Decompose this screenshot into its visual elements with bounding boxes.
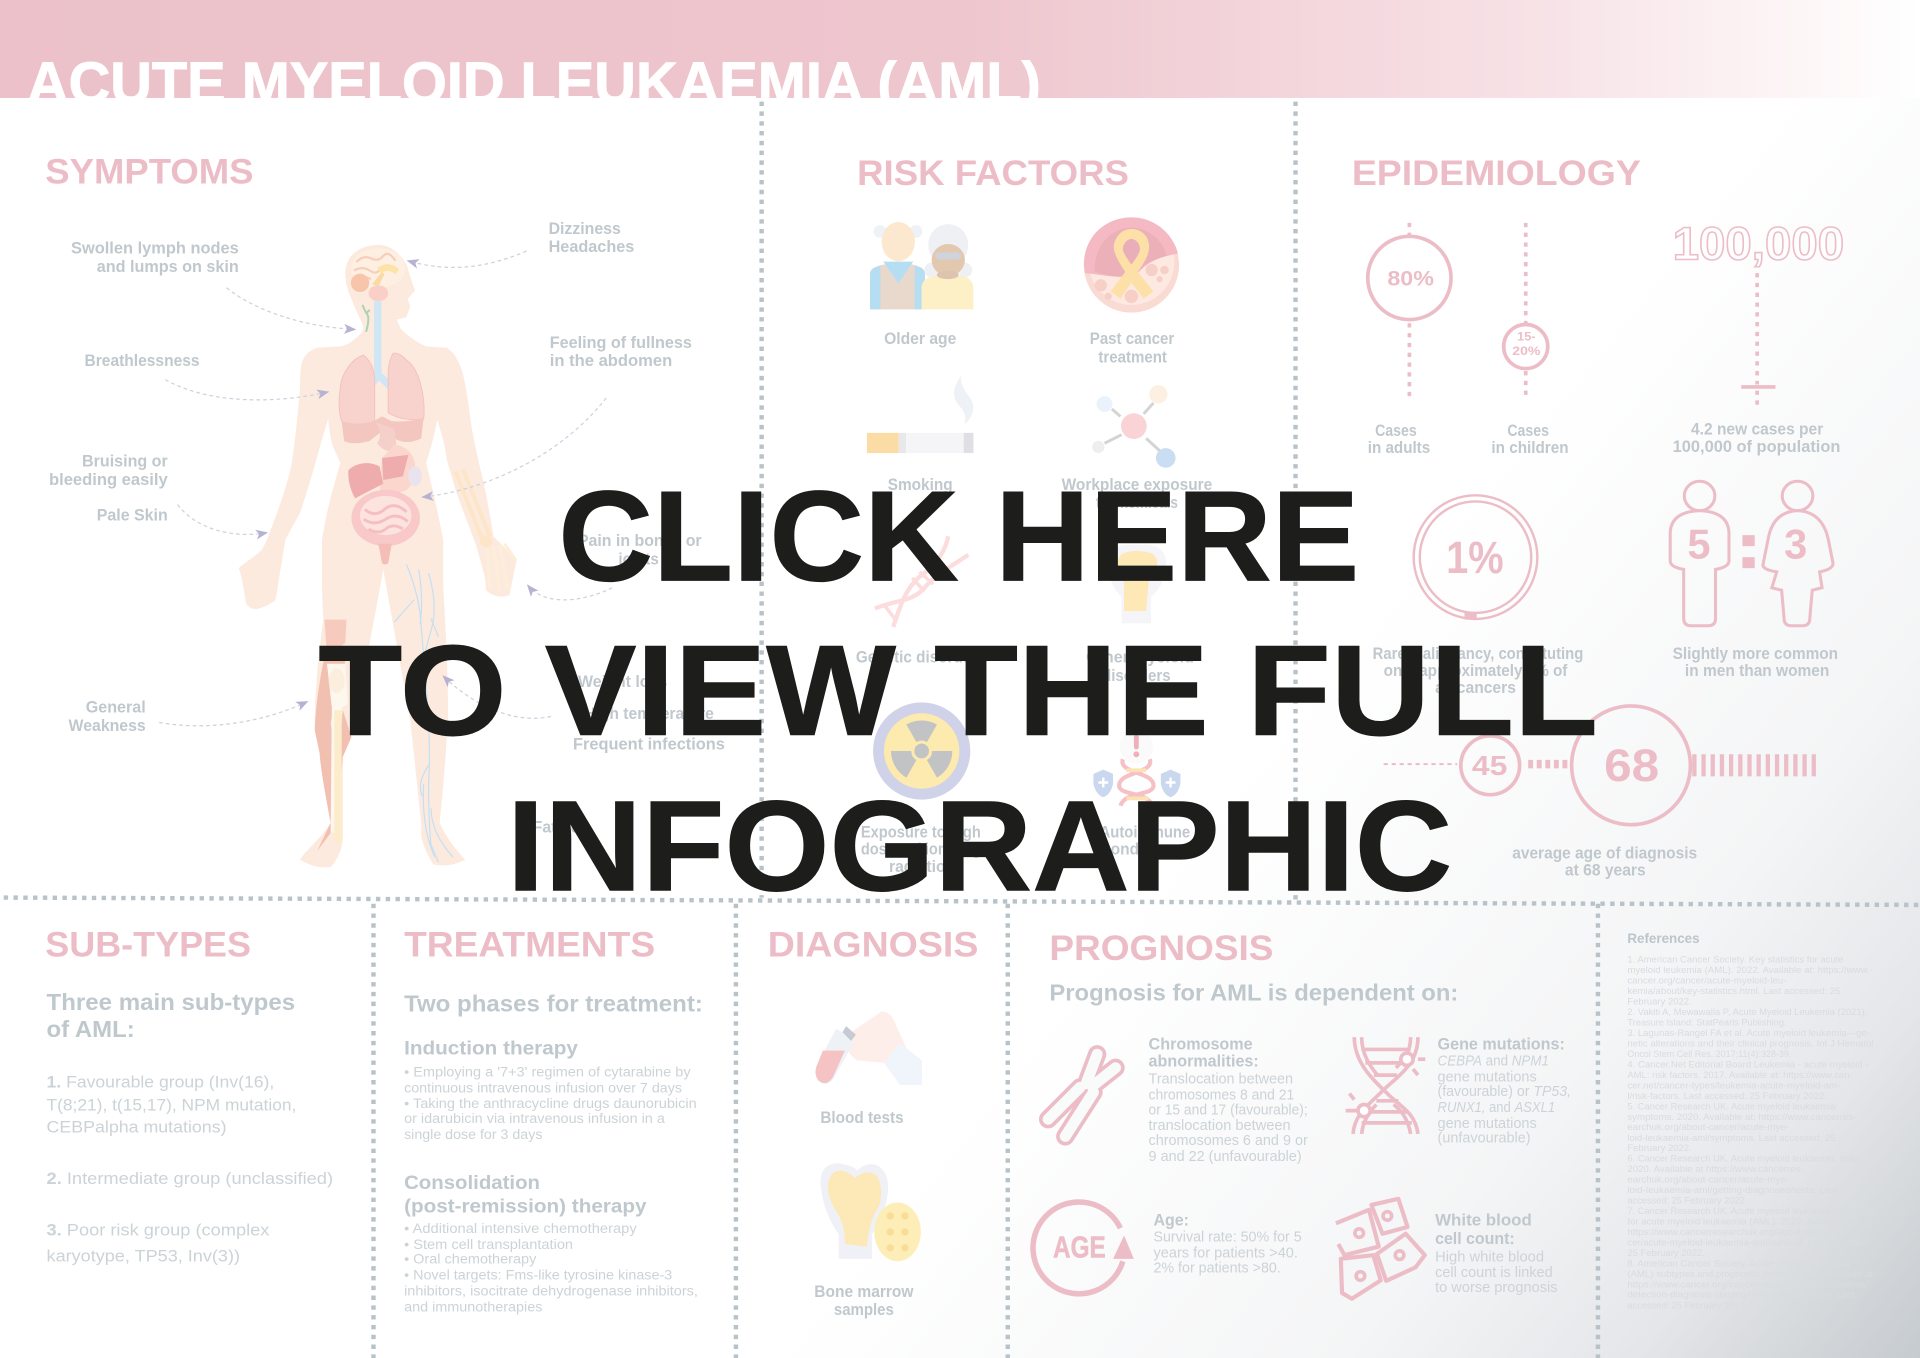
stat: male to female ratio: 5 [1687,520,1711,567]
stat: 80 percent adults: Cases [1375,421,1417,440]
text: age: Survival rate: 50% for 5 [1153,1230,1302,1246]
title banner: ACUTE MYELOID LEUKAEMIA (AML) [27,51,1041,116]
icon: age: AGE [1053,1231,1106,1265]
icon: radiation [873,702,970,800]
text: gene mutations: (unfavourable) [1438,1130,1531,1146]
text: white blood cell count: High white blood [1435,1249,1544,1265]
label: fatigue: Fatigue [533,818,589,837]
text: chromosome abnormalities: chromosomes 8 and 21 [1149,1088,1294,1104]
label: fullness: in the abdomen [550,351,672,370]
text: chromosome abnormalities: 9 and 22 (unfavourable) [1149,1149,1302,1165]
stat: 80 percent adults: 80% [1387,267,1434,290]
text: group list: 3. Poor risk group (complex [47,1221,270,1240]
text: chromosome abnormalities: Chromosome [1149,1034,1253,1053]
label: swollen lymph nodes: and lumps on skin [97,257,239,276]
text: reference list: AML: risk factors. 2017. Available at: https://www.can- [1627,1070,1853,1080]
icon: molecule [1092,385,1176,468]
label: smoking: Smoking [888,475,953,494]
label: bruising: Bruising or [82,452,168,471]
text: consolidation therapy: • Additional intensive chemotherapy [404,1220,638,1236]
brain [351,249,405,301]
stat: average age of diagnosis: 45 [1472,750,1507,781]
label: pain in bones [578,531,702,569]
icon: white blood cells [1336,1199,1425,1299]
icon: age [1033,1202,1134,1294]
heading: symptoms: SYMPTOMS [45,152,253,192]
text: reference list: loid-leukaemia-aml/symptoms. Last accessed: 25 [1627,1133,1836,1143]
label: exposure to radiation: Exposure to high [861,823,981,842]
label: past cancer treatment: treatment [1098,347,1167,366]
text: reference list: 7. Cancer Research UK. Acute myeloid leukaemia: survival [1627,1206,1872,1216]
label: workplace exposure: to chemicals [1096,493,1178,512]
icon: bone [1107,545,1167,623]
text: reference list: earchuk.org/about-cancer/acute-mye- [1627,1175,1789,1185]
intestines [351,490,420,565]
text: chromosome abnormalities: translocation between [1149,1118,1291,1134]
label: exposure to radiation: radiation [889,857,955,876]
text: consolidation therapy: • Stem cell transplantation [404,1236,573,1252]
text: gene mutations: Gene mutations: [1438,1034,1565,1053]
text: gene mutations [1438,1034,1571,1146]
heading: references: References [1627,931,1700,946]
text: induction therapy: • Employing a '7+3' regimen of cytarabine by [404,1063,692,1079]
text: reference list [1627,955,1875,1310]
text: chromosome abnormalities: chromosomes 6 and 9 or [1149,1133,1308,1149]
text: reference list: accessed: 25 February 2022. [1627,1196,1747,1206]
leg veins [394,565,453,862]
text: reference list: cer/acute-myeloid-leukaemia-aml/survival. Last accessed: [1627,1237,1871,1247]
label: pain in bones: joints [617,550,659,569]
text: chromosome abnormalities: or 15 and 17 (favourable); [1149,1102,1308,1118]
stat: 15-20 percent children: Cases [1507,421,1549,440]
label: pale skin: Pale Skin [97,505,168,524]
stat: average age of diagnosis: average age of diagnosis [1512,843,1697,862]
panel: diagnosis [768,924,978,1319]
text: group list: karyotype, TP53, Inv(3)) [47,1246,240,1265]
call to action overlay: TO VIEW THE FULL [318,620,1598,763]
title banner [0,0,1920,116]
label: weight loss and infections: Weight loss [578,672,667,691]
stat: 15-20 percent children: in children [1491,438,1569,457]
label: workplace exposure [1062,475,1212,512]
arrow: dizziness [408,251,527,267]
text: chromosome abnormalities [1149,1034,1308,1165]
stat: new cases per 100,000: 4.2 new cases per [1691,420,1824,439]
text: reference list: (AML) subtypes and prognostic factors. 2018. Available at: [1627,1269,1875,1279]
text: consolidation therapy: Consolidation [404,1172,540,1194]
text: reference list: detection-diagnosis-staging/how-classified.html. Last [1627,1290,1856,1300]
text: age: years for patients >40. [1153,1246,1298,1262]
text: reference list: cancer.org/cancer/acute-myeloid-leu- [1627,976,1787,986]
stat: average age of diagnosis: at 68 years [1565,861,1646,880]
label: past cancer treatment [1090,329,1175,366]
subheading: two phases: Two phases for treatment: [404,990,703,1016]
arrow: breathlessness [165,380,328,400]
label: weight loss and infections: High temperature [584,704,714,723]
label: past cancer treatment: Past cancer [1090,329,1175,348]
text: reference list: cer.net/cancer-types/leukemia-acute-myeloid-am- [1627,1080,1840,1090]
text: reference list: netic alterations and their clinical prognosis. Int J Hematol [1627,1038,1873,1048]
text: chromosome abnormalities: abnormalities: [1149,1052,1259,1071]
subheading: three main sub-types [47,989,295,1042]
heading: diagnosis: DIAGNOSIS [768,924,978,964]
label: other myeloid disorders: disorders [1102,666,1171,685]
arrow: feeling of fullness [422,398,606,497]
arm and hand bones [456,469,516,591]
label: weight loss and infections: Frequent infections [573,734,725,753]
label: breathlessness: Breathlessness [84,351,200,370]
label: exposure to radiation [861,823,981,876]
stat: 1 percent: Rare malignancy, constituting [1373,644,1583,663]
text: induction therapy [404,1037,697,1142]
text: reference list: https://www.cancer.org/cancer/acute-myeloid-leukemia/- [1627,1279,1871,1289]
panel: risk factors [856,153,1212,876]
stat: 15-20 percent children: 20% [1512,344,1541,358]
stat: new cases per 100,000: 100,000 of population [1673,437,1840,456]
label: dizziness: Dizziness [549,219,621,238]
text: white blood cell count: cell count: [1435,1229,1515,1248]
stat: average age of diagnosis: 68 [1604,740,1659,791]
icon: cancer ribbon [1084,217,1179,313]
panel: sub-types [45,924,333,1265]
label: autoimmune conditions: conditions [1102,840,1180,859]
label: dizziness [549,219,634,256]
text: reference list: 25 February 2022. [1627,1248,1705,1258]
icon: autoimmune [1093,730,1180,806]
label: swollen lymph nodes: Swollen lymph nodes [71,238,239,257]
text: reference list: 2020. Available at https://www.cancerres- [1627,1164,1804,1174]
stat: male to female ratio [1670,481,1838,680]
label: fullness [550,333,692,370]
call to action overlay [318,465,1598,918]
trachea [372,301,400,397]
text: white blood cell count: cell count is linked [1435,1265,1553,1281]
stat: 1 percent: only approximately 1% of [1384,661,1568,680]
text: reference list: symptoms. 2020. Available at: https://www.cancerres- [1627,1112,1856,1122]
icon: older couple [870,222,973,309]
leg muscles [315,620,351,851]
call to action overlay: CLICK HERE [558,465,1359,608]
stat: male to female ratio: in men than women [1685,661,1829,680]
arrow: weight loss [443,676,551,718]
label: bruising [49,452,169,489]
text: group list: T(8;21), t(15,17), NPM mutation, [47,1096,296,1115]
label: autoimmune conditions: Autoimmune [1100,823,1190,842]
panel: epidemiology [1352,153,1844,880]
body illustration [239,245,517,867]
lymph nodes [362,305,370,332]
heading: treatments: TREATMENTS [404,924,655,964]
heading: risk factors: RISK FACTORS [857,153,1129,193]
text: consolidation therapy: and immunotherapies [404,1298,542,1314]
arrow: swollen lymph nodes [227,288,355,329]
panel: treatments [404,924,703,1314]
stat: male to female ratio: Slightly more common [1673,644,1838,663]
icon: blood test [816,1011,922,1085]
text: chromosome abnormalities: Translocation between [1149,1072,1293,1088]
text: reference list: https://www.cancerresearchuk.org/about-can- [1627,1227,1823,1237]
icon: dna mutation [1346,1037,1425,1134]
panel: prognosis [1033,928,1571,1299]
text: reference list: 1. American Cancer Society. Key statistics for acute [1627,955,1844,965]
label: fullness: Feeling of fullness [550,333,692,352]
label: exposure to radiation: doses of ionising [861,840,981,859]
arrow: general weakness [159,702,307,726]
text: white blood cell count: White blood [1435,1211,1532,1230]
arrow: pale skin [178,505,267,534]
text: reference list: accessed: 25 February 2022. [1627,1300,1747,1310]
text: age: 2% for patients >80. [1153,1260,1281,1276]
label: dizziness: Headaches [549,237,634,256]
text: induction therapy: or idarubicin via intravenous infusion in a [404,1110,665,1126]
text: reference list: for acute myeloid leukaemia (AML). 2022. Available at: [1627,1217,1859,1227]
stat: new cases per 100,000: 100,000 [1673,218,1844,270]
call to action overlay: INFOGRAPHIC [507,775,1452,918]
text: induction therapy: single dose for 3 days [404,1126,542,1142]
label: weight loss and infections [573,672,725,753]
stat: 15-20 percent children: 15- [1517,329,1536,343]
label: bone marrow samples [814,1282,914,1319]
text: gene mutations: gene mutations [1438,1116,1537,1132]
text: reference list: 2. Vakiti A, Mewawalla P, Acute Myeloid Leukemia (2021), [1627,1007,1867,1017]
heading: epidemiology: EPIDEMIOLOGY [1352,153,1641,193]
icon: bone marrow [820,1163,921,1261]
subheading: three main sub-types: Three main sub-types [47,989,295,1015]
stat: male to female ratio: 3 [1784,520,1807,567]
text: reference list: kemia/about/key-statistics.html. Last accessed: 25 [1627,986,1840,996]
label: other myeloid disorders: Other myeloid [1086,647,1194,666]
label: general weakness: Weakness [69,716,146,735]
text: group list: 2. Intermediate group (unclassified) [47,1169,333,1188]
text: induction therapy: Induction therapy [404,1037,578,1059]
label: general weakness [69,698,146,735]
label: pain in bones: Pain in bones or [578,531,702,550]
text: reference list: Treasure Island: StatPearls Publishing. [1627,1018,1787,1028]
stat: 1 percent [1373,495,1583,697]
label: bruising: bleeding easily [49,470,169,489]
panel: symptoms [45,152,725,867]
label: blood tests: Blood tests [820,1108,904,1127]
stat: 1 percent: all cancers [1435,678,1516,697]
text: consolidation therapy: • Oral chemotherapy [404,1251,537,1267]
text: reference list: loid-leukaemia-aml/getting-diagnosed/tests. Last [1627,1185,1838,1195]
subheading: dependent on: Prognosis for AML is dependent on: [1049,979,1458,1005]
text: reference list: myeloid leukemia (AML). 2022. Available at: https://www.- [1627,965,1873,975]
label: genetic disorders: Genetic disorders [856,647,986,666]
text: reference list: Oncol Stem Cell Res. 2017;11(4):328-39. [1627,1049,1791,1059]
text: reference list: 6. Cancer Research UK. Acute myeloid leukaemia: tests. [1627,1154,1862,1164]
label: general weakness: General [86,698,146,717]
stat: 1 percent: 1% [1446,532,1504,583]
label: workplace exposure: Workplace exposure [1062,475,1212,494]
label: swollen lymph nodes [71,238,239,276]
text: consolidation therapy: (post-remission) therapy [404,1195,647,1217]
stat: new cases per 100,000 [1673,218,1844,456]
text: consolidation therapy [404,1172,698,1314]
text: group list: 1. Favourable group (Inv(16), [47,1072,274,1091]
panel: references [1627,931,1875,1310]
liver and stomach [348,445,422,502]
text: reference list: l/risk-factors. Last accessed: 25 February 2022. [1627,1091,1827,1101]
stat: average age of diagnosis [1384,706,1818,880]
stat: 80 percent adults: in adults [1368,438,1430,457]
text: reference list: 5. Cancer Research UK. Acute myeloid leukaemia: [1627,1101,1838,1111]
subheading: three main sub-types: of AML: [47,1016,135,1042]
text: reference list: 4. Cancer.Net Editorial Board Leukemia - acute myeloid - [1627,1059,1869,1069]
text: white blood cell count [1435,1211,1558,1296]
label: bone marrow samples: samples [834,1300,894,1319]
text: induction therapy: • Taking the anthracycline drugs daunorubicin [404,1095,697,1111]
label: other myeloid disorders [1086,647,1194,685]
text: gene mutations: (favourable) or TP53, [1438,1084,1571,1100]
text: reference list: February 2022. [1627,997,1692,1007]
text: reference list: earchuk.org/about-cancer/acute-mye- [1627,1122,1789,1132]
text: consolidation therapy: inhibitors, isocitrate dehydrogenase inhibitors, [404,1283,698,1299]
text: group list [47,1072,333,1265]
text: reference list: February 2022. [1627,1143,1692,1153]
text: age: Age: [1153,1211,1189,1230]
arrow: pain in bones [528,585,612,600]
stat: 80 percent adults [1368,223,1451,457]
label: bone marrow samples: Bone marrow [814,1282,914,1301]
icon: cigarette [867,376,973,453]
icon: chromosome [1048,1054,1116,1136]
icon: dna [875,536,968,627]
text: group list: CEBPalpha mutations) [47,1118,227,1137]
text: reference list: 3. Lagunas-Rangel FA et al. Acute myeloid leukemia—ge- [1627,1028,1870,1038]
lungs [339,353,424,451]
label: autoimmune conditions [1100,823,1190,859]
text: induction therapy: continuous intravenous infusion over 7 days [404,1079,682,1095]
text: gene mutations: gene mutations [1438,1069,1537,1085]
text: age [1153,1211,1302,1276]
stat: 15-20 percent children [1491,223,1569,457]
text: gene mutations: RUNX1, and ASXL1 [1438,1100,1555,1116]
heading: sub-types: SUB-TYPES [45,924,251,964]
text: consolidation therapy: • Novel targets: Fms-like tyrosine kinase-3 [404,1267,672,1283]
text: reference list: 8. American Cancer Society. Acute myeloid leukemia [1627,1258,1851,1268]
text: gene mutations: CEBPA and NPM1 [1438,1053,1549,1069]
heading: prognosis: PROGNOSIS [1049,928,1273,968]
text: white blood cell count: to worse prognosis [1435,1280,1558,1296]
label: older age: Older age [884,329,956,348]
